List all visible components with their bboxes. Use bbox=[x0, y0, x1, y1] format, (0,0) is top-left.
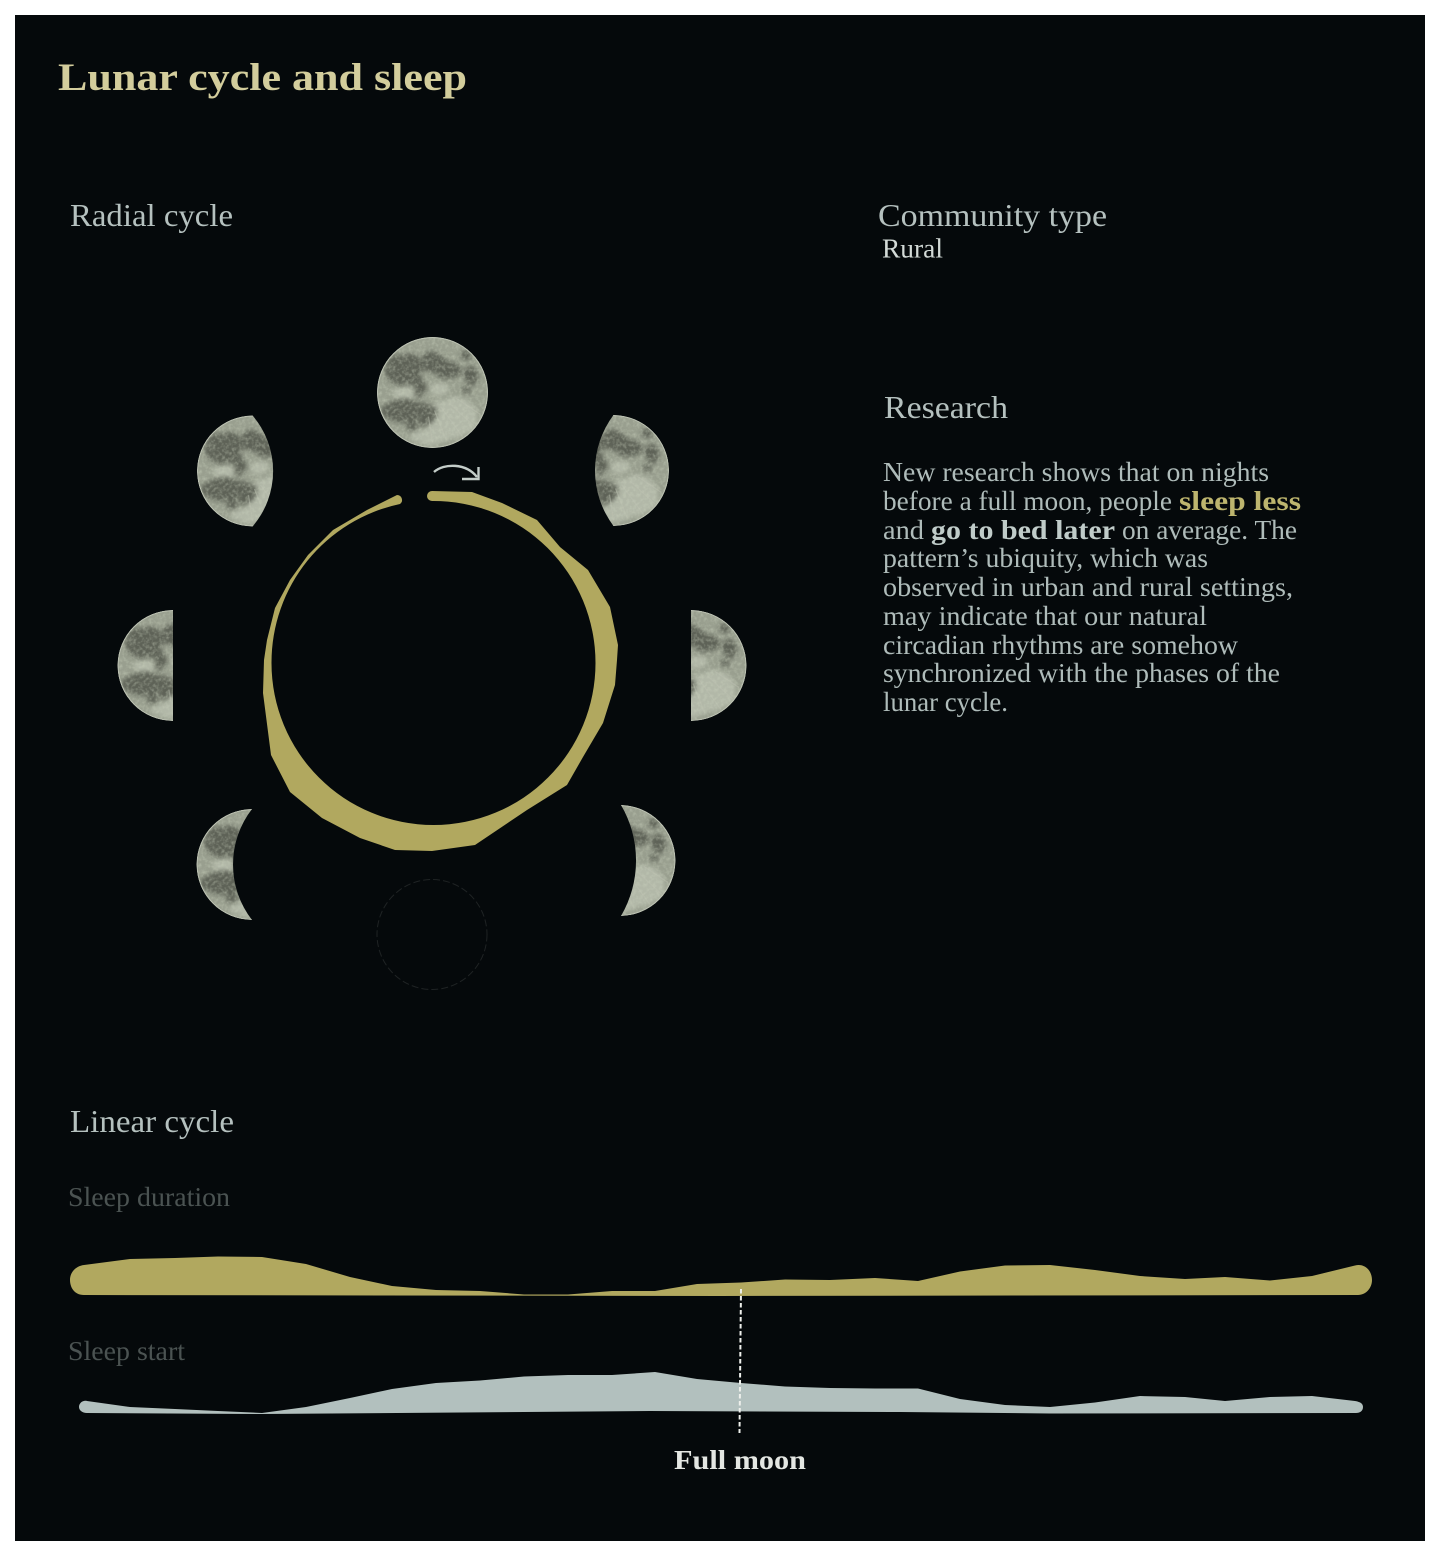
chart: sleep start area bbox=[79, 1372, 1363, 1414]
icon: crescent moon, lower left bbox=[196, 809, 252, 920]
text block: research description: may indicate that our natural bbox=[883, 601, 1207, 631]
chart: radial sleep duration ring bbox=[263, 491, 618, 851]
icon: crescent moon, lower right bbox=[621, 805, 676, 916]
text block: research description bbox=[883, 457, 1301, 717]
text block: research description: sleep less bbox=[1179, 486, 1301, 516]
text block: research description: go to bed later bbox=[931, 515, 1115, 545]
marker: full moon dashed line bbox=[740, 1289, 741, 1433]
text block: research description: observed in urban and rural settings, bbox=[883, 572, 1293, 602]
text block: research description: circadian rhythms are somehow bbox=[883, 630, 1239, 660]
text block: research description: lunar cycle. bbox=[883, 687, 1008, 717]
title: Lunar cycle and sleep bbox=[58, 56, 467, 99]
chart: sleep duration area bbox=[70, 1256, 1372, 1296]
icon: last quarter moon, right bbox=[691, 610, 746, 721]
icon: quarter moon, left bbox=[118, 610, 173, 721]
icon: full moon bbox=[377, 337, 488, 448]
text block: research description: New research shows that on nights bbox=[883, 457, 1269, 487]
label: sleep start: Sleep start bbox=[68, 1336, 186, 1366]
text block: research description: synchronized with the phases of the bbox=[883, 658, 1280, 688]
text block: research description: before a full moon, people bbox=[883, 486, 1172, 516]
heading: linear cycle: Linear cycle bbox=[70, 1103, 234, 1139]
heading: radial cycle: Radial cycle bbox=[70, 197, 233, 233]
icon: gibbous moon, upper left bbox=[197, 416, 274, 526]
icon: new moon outline bbox=[377, 880, 487, 990]
text block: research description: and bbox=[883, 515, 925, 545]
text block: research description: pattern’s ubiquity, which was bbox=[883, 543, 1208, 573]
label: full moon: Full moon bbox=[674, 1445, 806, 1475]
community type value: Rural bbox=[882, 234, 943, 264]
heading: research: Research bbox=[884, 389, 1008, 425]
label: sleep duration: Sleep duration bbox=[68, 1182, 231, 1212]
text block: research description: on average. The bbox=[1122, 515, 1297, 545]
arrow: direction of cycle bbox=[434, 466, 478, 479]
heading: community type: Community type bbox=[878, 197, 1107, 233]
icon: waning gibbous moon bbox=[595, 415, 669, 526]
